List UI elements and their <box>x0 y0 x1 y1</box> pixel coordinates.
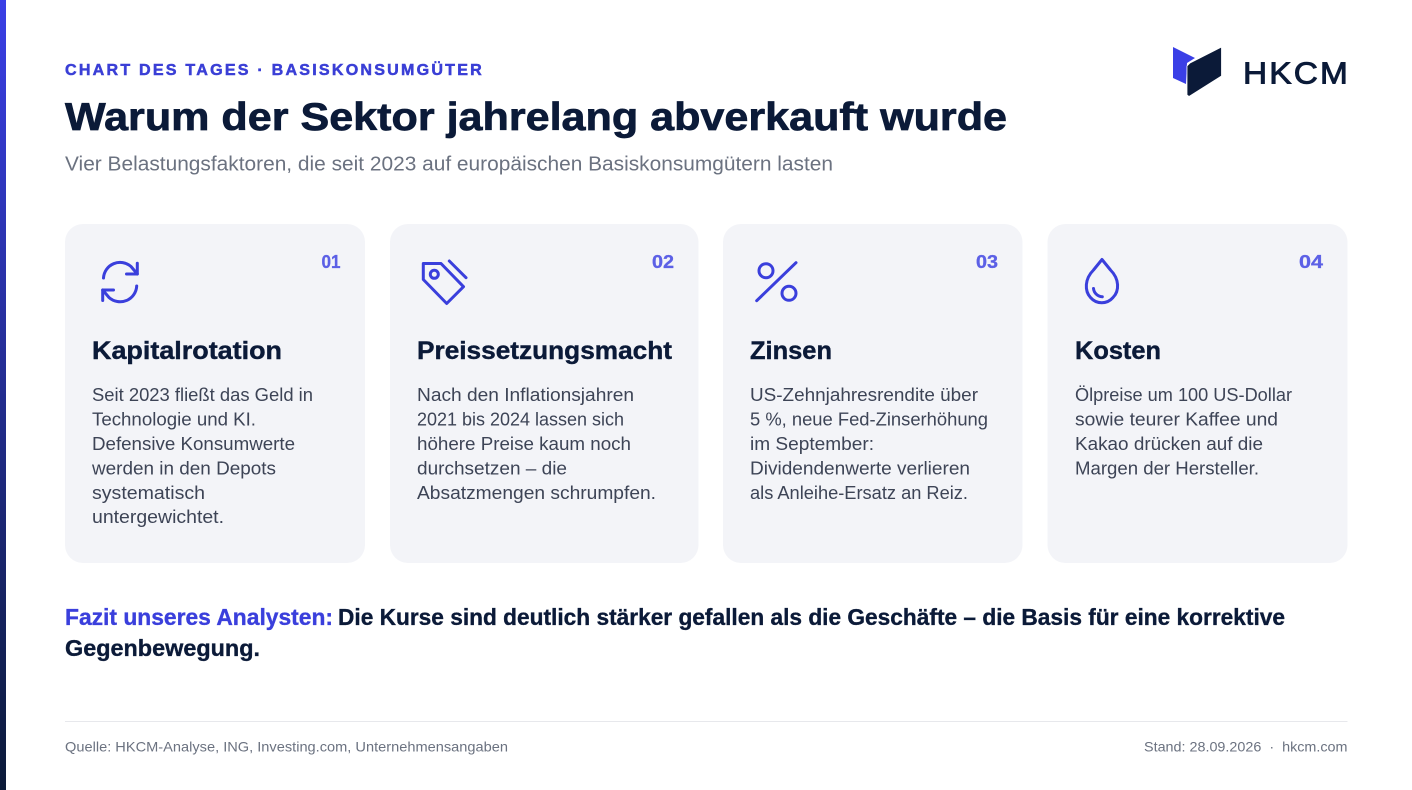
card number: 01 <box>322 252 340 272</box>
card text: Nach den Inflationsjahren <box>417 385 634 405</box>
card text: 2021 bis 2024 lassen sich <box>417 409 624 429</box>
card heading: Preissetzungsmacht <box>417 337 673 365</box>
card text: werden in den Depots <box>91 458 276 478</box>
icon: price tag <box>423 261 466 304</box>
eyebrow: CHART DES TAGES · BASISKONSUMGÜTER <box>65 60 484 79</box>
card text <box>91 385 313 527</box>
panel: Zinsen <box>723 224 1022 563</box>
card text: als Anleihe-Ersatz an Reiz. <box>750 483 968 503</box>
footer date and site: Stand: 28.09.2026 · hkcm.com <box>1144 738 1348 754</box>
logo wordmark: HKCM <box>1243 56 1350 90</box>
subtitle: Vier Belastungsfaktoren, die seit 2023 auf europäischen Basiskonsumgütern lasten <box>65 154 833 176</box>
card text: systematisch <box>92 483 205 503</box>
conclusion: Die Kurse sind deutlich stärker gefallen als die Geschäfte – die Basis für eine korrektive <box>338 604 1285 630</box>
card text <box>1075 385 1292 478</box>
card text: höhere Preise kaum noch <box>417 434 631 454</box>
card number: 03 <box>976 252 998 272</box>
footer source: Quelle: HKCM-Analyse, ING, Investing.com, Unternehmensangaben <box>65 738 508 754</box>
card text: 5 %, neue Fed-Zinserhöhung <box>750 409 988 429</box>
card heading: Zinsen <box>750 337 832 365</box>
logo mark <box>1173 47 1222 96</box>
accent bar <box>0 0 6 790</box>
card text: im September: <box>750 434 874 454</box>
card text <box>417 385 656 503</box>
card text: Dividendenwerte verlieren <box>750 458 970 478</box>
card text: Technologie und KI. <box>92 409 256 429</box>
card text: sowie teurer Kaffee und <box>1075 409 1278 429</box>
title: Warum der Sektor jahrelang abverkauft wurde <box>65 96 1007 139</box>
card text: Ölpreise um 100 US-Dollar <box>1075 385 1292 405</box>
icon: oil drop <box>1086 260 1118 303</box>
card heading: Kapitalrotation <box>92 337 282 365</box>
card text: Seit 2023 fließt das Geld in <box>92 385 313 405</box>
card heading: Kosten <box>1075 337 1161 365</box>
card text <box>750 385 988 503</box>
icon: percent <box>757 263 796 301</box>
card text: Margen der Hersteller. <box>1075 458 1259 478</box>
card text: Kakao drücken auf die <box>1075 434 1263 454</box>
conclusion <box>65 604 1285 661</box>
card text: Absatzmengen schrumpfen. <box>417 483 656 503</box>
card text: US-Zehnjahresrendite über <box>750 385 978 405</box>
icon: rotation arrows <box>103 262 137 302</box>
card text: durchsetzen – die <box>417 458 567 478</box>
conclusion: Gegenbewegung. <box>65 635 260 661</box>
card text: Defensive Konsumwerte <box>92 434 295 454</box>
card text: untergewichtet. <box>92 507 224 527</box>
panel: Preissetzungsmacht <box>390 224 698 563</box>
logo <box>1173 47 1350 96</box>
panel: Kapitalrotation <box>65 224 365 563</box>
panel: Kosten <box>1048 224 1348 563</box>
card number: 04 <box>1299 252 1323 272</box>
conclusion: Fazit unseres Analysten: <box>65 604 333 630</box>
card number: 02 <box>652 252 674 272</box>
